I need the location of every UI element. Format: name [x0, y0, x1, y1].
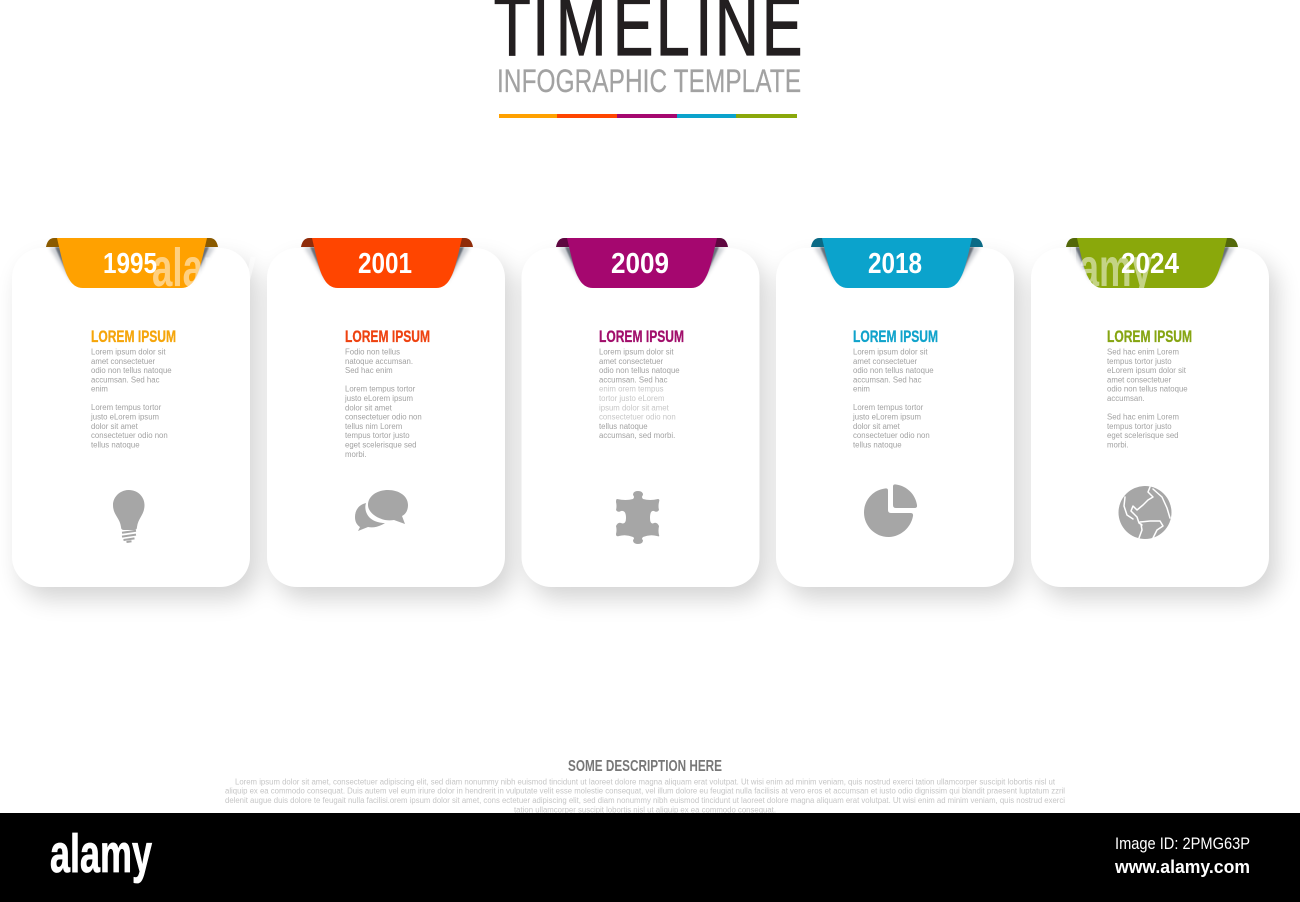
text block: 2009: consectetuer odio non — [599, 413, 676, 422]
description text — [225, 778, 1065, 814]
text block: 2024: eget scelerisque sed — [1107, 431, 1179, 440]
text block: 2009: amet consectetuer — [599, 357, 664, 366]
footer bar — [0, 813, 1300, 902]
text block: 2018: consectetuer odio non — [853, 431, 930, 440]
text block: 2009: Lorem ipsum dolor sit — [599, 348, 674, 356]
description text: aliquip ex ea commodo consequat. Duis autem vel eum iriure dolor in hendrerit in vulputate velit esse molestie consequat, vel illum dolore eu feugiat nulla facilisis at vero eros et accumsan et iusto odio dignissim qui blandit praesent luptatum zzril — [225, 786, 1065, 796]
panel: 2018 — [776, 238, 1014, 587]
panel: 1995 — [12, 238, 250, 587]
text block: 2024: Sed hac enim Lorem — [1107, 348, 1179, 356]
text block: 1995 — [90, 348, 172, 449]
description text: Lorem ipsum dolor sit amet, consectetuer adipiscing elit, sed diam nonummy nibh euismod tincidunt ut laoreet dolore magna aliquam erat volutpat. Ut wisi enim ad minim veniam, quis nostrud exerci tation ullamcorper suscipit lobortis nisl ut — [235, 778, 1056, 786]
icon: speech bubbles — [355, 490, 408, 531]
text block: 2024: tempus tortor justo — [1107, 422, 1172, 431]
text block: 2001: morbi. — [345, 450, 367, 459]
description text: tation ullamcorper suscipit lobortis nisl ut aliquip ex ea commodo consequat. — [514, 806, 776, 814]
text block: 2024: tempus tortor justo — [1107, 357, 1172, 366]
colour bar — [499, 114, 797, 118]
ribbon: 2009 — [556, 238, 728, 288]
text block: 1995: dolor sit amet — [91, 422, 139, 431]
text block: 2001: consectetuer odio non — [345, 413, 422, 422]
text block: 2024: accumsan. — [1107, 394, 1145, 403]
text block: 2018: amet consectetuer — [853, 357, 918, 366]
year: 2009: 2009 — [611, 248, 669, 280]
year: 2024: 2024 — [1121, 248, 1179, 280]
text block: 2024: eLorem ipsum dolor sit — [1107, 366, 1187, 375]
icon: globe — [1118, 486, 1172, 539]
text block: 2018: accumsan. Sed hac — [853, 375, 922, 384]
text block: 2001: Sed hac enim — [345, 366, 393, 375]
text block: 1995: odio non tellus natoque — [91, 366, 172, 375]
text block: 2001: Lorem tempus tortor — [345, 385, 416, 394]
icon: puzzle piece — [616, 491, 659, 544]
heading: 1995: LOREM IPSUM — [91, 328, 176, 346]
text block: 2009: accumsan. Sed hac — [599, 375, 668, 384]
year: 2001: 2001 — [358, 248, 412, 280]
text block: 2018: enim — [853, 385, 870, 394]
text block: 1995: Lorem ipsum dolor sit — [91, 348, 166, 356]
text block: 2009 — [599, 348, 680, 440]
panel: 2009 — [522, 238, 760, 587]
heading: 2024: LOREM IPSUM — [1107, 328, 1192, 346]
text block: 2024 — [1107, 348, 1188, 450]
text block: 1995: Lorem tempus tortor — [91, 403, 162, 412]
text block: 2001: dolor sit amet — [345, 403, 393, 412]
text block: 2024: odio non tellus natoque — [1107, 385, 1188, 394]
ribbon: 1995 — [46, 238, 218, 288]
text block: 2001: Fodio non tellus — [345, 348, 400, 356]
text block: 2024: morbi. — [1107, 440, 1129, 450]
footer logo: alamy — [50, 824, 152, 884]
ribbon: 2001 — [301, 238, 473, 288]
year: 1995: 1995 — [103, 248, 157, 280]
image id: Image ID: 2PMG63P — [1115, 834, 1250, 853]
ribbon: 2018 — [811, 238, 983, 288]
text block: 2009: tortor justo eLorem — [599, 394, 664, 403]
text block: 1995: enim — [91, 385, 108, 394]
text block: 2018: dolor sit amet — [853, 422, 901, 431]
text block: 2009: odio non tellus natoque — [599, 366, 680, 375]
year: 2018: 2018 — [868, 248, 922, 280]
text block: 1995: amet consectetuer — [91, 357, 156, 366]
watermark: 1995 ribbon: alamy — [152, 238, 256, 298]
description heading: SOME DESCRIPTION HERE — [568, 758, 722, 775]
text block: 2001: natoque accumsan. — [345, 357, 413, 366]
description text: delenit augue duis dolore te feugait nulla facilisi.orem ipsum dolor sit amet, cons ectetuer adipiscing elit, sed diam nonummy nibh euismod tincidunt ut laoreet dolore magna aliquam erat volutpat. Ut wisi enim ad minim veniam, quis nostrud exerci — [225, 796, 1065, 805]
text block: 2018 — [852, 348, 934, 449]
text block: 2001: eget scelerisque sed — [345, 440, 417, 450]
ribbon: 2024 — [1066, 238, 1238, 288]
text block: 2009: accumsan, sed morbi. — [599, 431, 675, 440]
text block: 1995: tellus natoque — [91, 440, 140, 449]
text block: 2018: tellus natoque — [853, 440, 902, 449]
text block: 1995: justo eLorem ipsum — [90, 412, 159, 422]
text block: 2001 — [344, 348, 422, 459]
subtitle: INFOGRAPHIC TEMPLATE — [497, 64, 801, 100]
text block: 2001: tellus nim Lorem — [345, 422, 402, 431]
text block: 2018: Lorem tempus tortor — [853, 403, 924, 412]
text block: 2001: justo eLorem ipsum — [344, 394, 413, 403]
icon: pie chart — [864, 484, 917, 537]
text block: 2018: odio non tellus natoque — [853, 366, 934, 375]
text block: 2009: tellus natoque — [599, 422, 648, 431]
text block: 2018: justo eLorem ipsum — [852, 412, 921, 422]
text block: 2024: Sed hac enim Lorem — [1107, 413, 1179, 422]
icon: light bulb — [113, 490, 144, 542]
text block: 2024: amet consectetuer — [1107, 375, 1172, 384]
heading: 2018: LOREM IPSUM — [853, 328, 938, 346]
watermark: 2024 ribbon: alamy — [1048, 238, 1152, 298]
panel: 2001 — [267, 238, 505, 587]
text block: 2009: enim orem tempus — [599, 385, 664, 394]
text block: 2009: ipsum dolor sit amet — [599, 403, 670, 412]
heading: 2001: LOREM IPSUM — [345, 328, 430, 346]
heading: 2009: LOREM IPSUM — [599, 328, 684, 346]
text block: 1995: consectetuer odio non — [91, 431, 168, 440]
panel: 2024 — [1031, 238, 1269, 587]
text block: 1995: accumsan. Sed hac — [91, 375, 160, 384]
website: www.alamy.com — [1114, 857, 1250, 877]
text block: 2018: Lorem ipsum dolor sit — [853, 348, 928, 356]
text block: 2001: tempus tortor justo — [345, 431, 410, 440]
